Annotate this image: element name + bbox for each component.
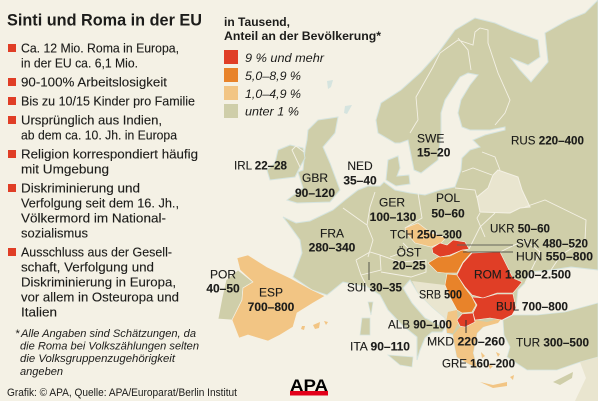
label: Austria bbox=[392, 246, 426, 272]
label: France: FRA bbox=[320, 226, 344, 240]
map of Europe bbox=[218, 0, 598, 401]
land: Ireland bbox=[267, 145, 305, 180]
APA logo: APA bbox=[290, 377, 328, 395]
label: Germany bbox=[370, 196, 417, 224]
label: Ukraine: UKR 50–60 bbox=[490, 222, 550, 236]
bullet: origin: ab dem ca. 10. Jh. in Europa bbox=[21, 128, 178, 142]
country: Bulgaria, 9 percent and more bbox=[472, 294, 516, 320]
bullet: unemployment: 90-100% Arbeitslosigkeit bbox=[21, 74, 167, 90]
label: Spain: 700–800 bbox=[248, 300, 295, 314]
label: Sweden bbox=[417, 132, 451, 160]
country borders bbox=[292, 28, 586, 287]
label: Portugal bbox=[206, 268, 240, 296]
label: Portugal: POR bbox=[210, 268, 236, 282]
legend item: under 1 percent bbox=[224, 104, 299, 118]
label: Romania: ROM 1.800–2.500 bbox=[474, 268, 571, 282]
label: Macedonia: MKD 220–260 bbox=[427, 334, 505, 348]
land: Sicily, Sardinia and Corsica bbox=[360, 302, 413, 367]
label: Great Britain bbox=[295, 171, 335, 200]
bullet: discrimination: Verfolgung seit dem 16. Jh., bbox=[21, 196, 179, 210]
bullet: origin: Ursprünglich aus Indien, bbox=[21, 112, 162, 128]
land: Syria region bbox=[575, 357, 598, 401]
source line: Grafik: © APA, Quelle: APA/Europarat/Berlin Institut bbox=[7, 387, 237, 399]
bullet: exclusion: Italien bbox=[21, 304, 57, 320]
country: Spain, 1.0-4.9 percent bbox=[232, 255, 325, 341]
label: Slovakia: SVK 480–520 bbox=[516, 236, 588, 250]
title: Sinti und Roma in der EU bbox=[7, 10, 202, 30]
bullet: exclusion: Diskriminierung in Europa, bbox=[21, 274, 176, 290]
label: France: 280–340 bbox=[309, 240, 356, 254]
bullet: exclusion: schaft, Verfolgung und bbox=[21, 260, 154, 274]
label: Russia: RUS 220–400 bbox=[511, 134, 584, 148]
legend item: 9 percent and more: 9 % und mehr bbox=[245, 51, 325, 65]
label: France bbox=[309, 226, 356, 254]
label: Portugal: 40–50 bbox=[206, 282, 240, 296]
label: Ireland: IRL 22–28 bbox=[234, 158, 287, 172]
label: Poland: POL bbox=[436, 191, 460, 205]
bullet: children: Bis zu 10/15 Kinder pro Familie bbox=[21, 94, 195, 108]
country: Hungary, 5.0-8.9 percent bbox=[428, 250, 472, 273]
label: Italy: ITA 90–110 bbox=[350, 340, 410, 354]
bullet: exclusion: Ausschluss aus der Gesell- bbox=[21, 244, 172, 260]
country value labels bbox=[206, 132, 593, 370]
legend heading: in Tausend, bbox=[224, 15, 290, 29]
Belarus, pale non-EU area bbox=[477, 170, 530, 213]
country: Serbia, 5.0-8.9 percent bbox=[445, 274, 476, 313]
footnote: Alle Angaben sind Schätzungen, da bbox=[20, 328, 196, 340]
land: Portugal bbox=[218, 270, 253, 320]
country: Slovakia, 9 percent and more bbox=[432, 240, 469, 257]
label: Albania: ALB 90–100 bbox=[388, 318, 452, 332]
land: Great Britain bbox=[287, 117, 340, 203]
label: Great Britain: 90–120 bbox=[295, 186, 335, 200]
bullet: discrimination: Diskriminierung und bbox=[21, 180, 140, 196]
footnote: die Volksgruppenzugehörigkeit bbox=[20, 353, 176, 365]
bullet: numbers: in der EU ca. 6,1 Mio. bbox=[21, 56, 138, 70]
bullet: origin bbox=[8, 112, 178, 142]
label: Greece: GRE 160–200 bbox=[442, 356, 515, 370]
legend heading bbox=[224, 15, 381, 43]
label: Turkey: TUR 300–500 bbox=[516, 336, 589, 350]
legend bbox=[224, 15, 381, 118]
land: Denmark bbox=[386, 156, 410, 186]
bullet: discrimination: sozialismus bbox=[21, 226, 88, 240]
label: Germany: GER bbox=[379, 196, 405, 210]
country: Czech Republic, 1.0-4.9 percent bbox=[405, 223, 446, 247]
label: Switzerland: SUI 30–35 bbox=[347, 280, 402, 294]
Greek islands bbox=[480, 352, 514, 388]
footnote: * bbox=[15, 328, 20, 340]
bullet: numbers: Ca. 12 Mio. Roma in Europa, bbox=[21, 40, 179, 56]
label: Sweden: SWE bbox=[417, 132, 444, 146]
bullet: religion: mit Umgebung bbox=[21, 162, 109, 176]
Balearic islands bbox=[301, 321, 328, 330]
country: Romania, 9 percent and more bbox=[457, 252, 522, 298]
label: Sweden: 15–20 bbox=[417, 146, 451, 160]
bullet: religion bbox=[8, 146, 198, 176]
label: Hungary: HUN 550–800 bbox=[516, 250, 593, 264]
label: Austria: 20–25 bbox=[392, 258, 426, 272]
label: Poland: 50–60 bbox=[431, 206, 465, 220]
footnote: die Roma bei Volkszählungen selten bbox=[20, 340, 199, 352]
label: Czech Republic: TCH 250–300 bbox=[390, 228, 462, 242]
land: Cyprus bbox=[553, 372, 573, 385]
legend item: 1.0-4.9 percent: 1,0–4,9 % bbox=[245, 87, 301, 101]
label: Spain: ESP bbox=[259, 286, 283, 300]
label: Great Britain: GBR bbox=[302, 171, 328, 185]
label: Serbia: SRB 500 bbox=[419, 288, 462, 302]
country: Albania, 1.0-4.9 percent bbox=[446, 310, 458, 333]
bullet: discrimination bbox=[8, 180, 179, 240]
land: continental Europe, Scandinavia and Russia bbox=[283, 0, 598, 368]
country: Greece, 1.0-4.9 percent bbox=[453, 318, 502, 368]
leader lines bbox=[369, 245, 513, 333]
label: Netherlands bbox=[343, 159, 377, 188]
bullet: discrimination: Völkermord im National- bbox=[21, 210, 166, 226]
land: small northern islands bbox=[327, 80, 352, 114]
label: Netherlands: 35–40 bbox=[343, 174, 377, 188]
legend item: under 1 percent: unter 1 % bbox=[245, 104, 299, 118]
label: Germany: 100–130 bbox=[370, 210, 417, 224]
bullet: religion: Religion korrespondiert häufig bbox=[21, 146, 198, 162]
bullet: numbers bbox=[8, 40, 179, 70]
label: Bulgaria: BUL 700–800 bbox=[496, 300, 568, 314]
legend item: 5.0-8.9 percent bbox=[224, 68, 301, 83]
bullet list bbox=[8, 40, 198, 320]
label: Netherlands: NED bbox=[347, 159, 373, 173]
label: Poland bbox=[431, 191, 465, 220]
country: Macedonia, 9 percent and more bbox=[457, 313, 475, 327]
footnote bbox=[15, 328, 199, 378]
label: Spain bbox=[248, 286, 295, 314]
bullet: exclusion: vor allem in Osteuropa und bbox=[21, 290, 179, 304]
legend item: 5.0-8.9 percent: 5,0–8,9 % bbox=[245, 69, 301, 83]
legend item: 1.0-4.9 percent bbox=[224, 86, 301, 101]
footnote: angeben bbox=[20, 366, 63, 378]
bullet: exclusion bbox=[8, 244, 179, 320]
label: Austria: ÖST bbox=[397, 246, 422, 260]
legend heading: Anteil an der Bevölkerung* bbox=[224, 29, 381, 43]
land: Turkey bbox=[503, 303, 598, 370]
West Balkans, pale non-EU area bbox=[412, 281, 457, 323]
